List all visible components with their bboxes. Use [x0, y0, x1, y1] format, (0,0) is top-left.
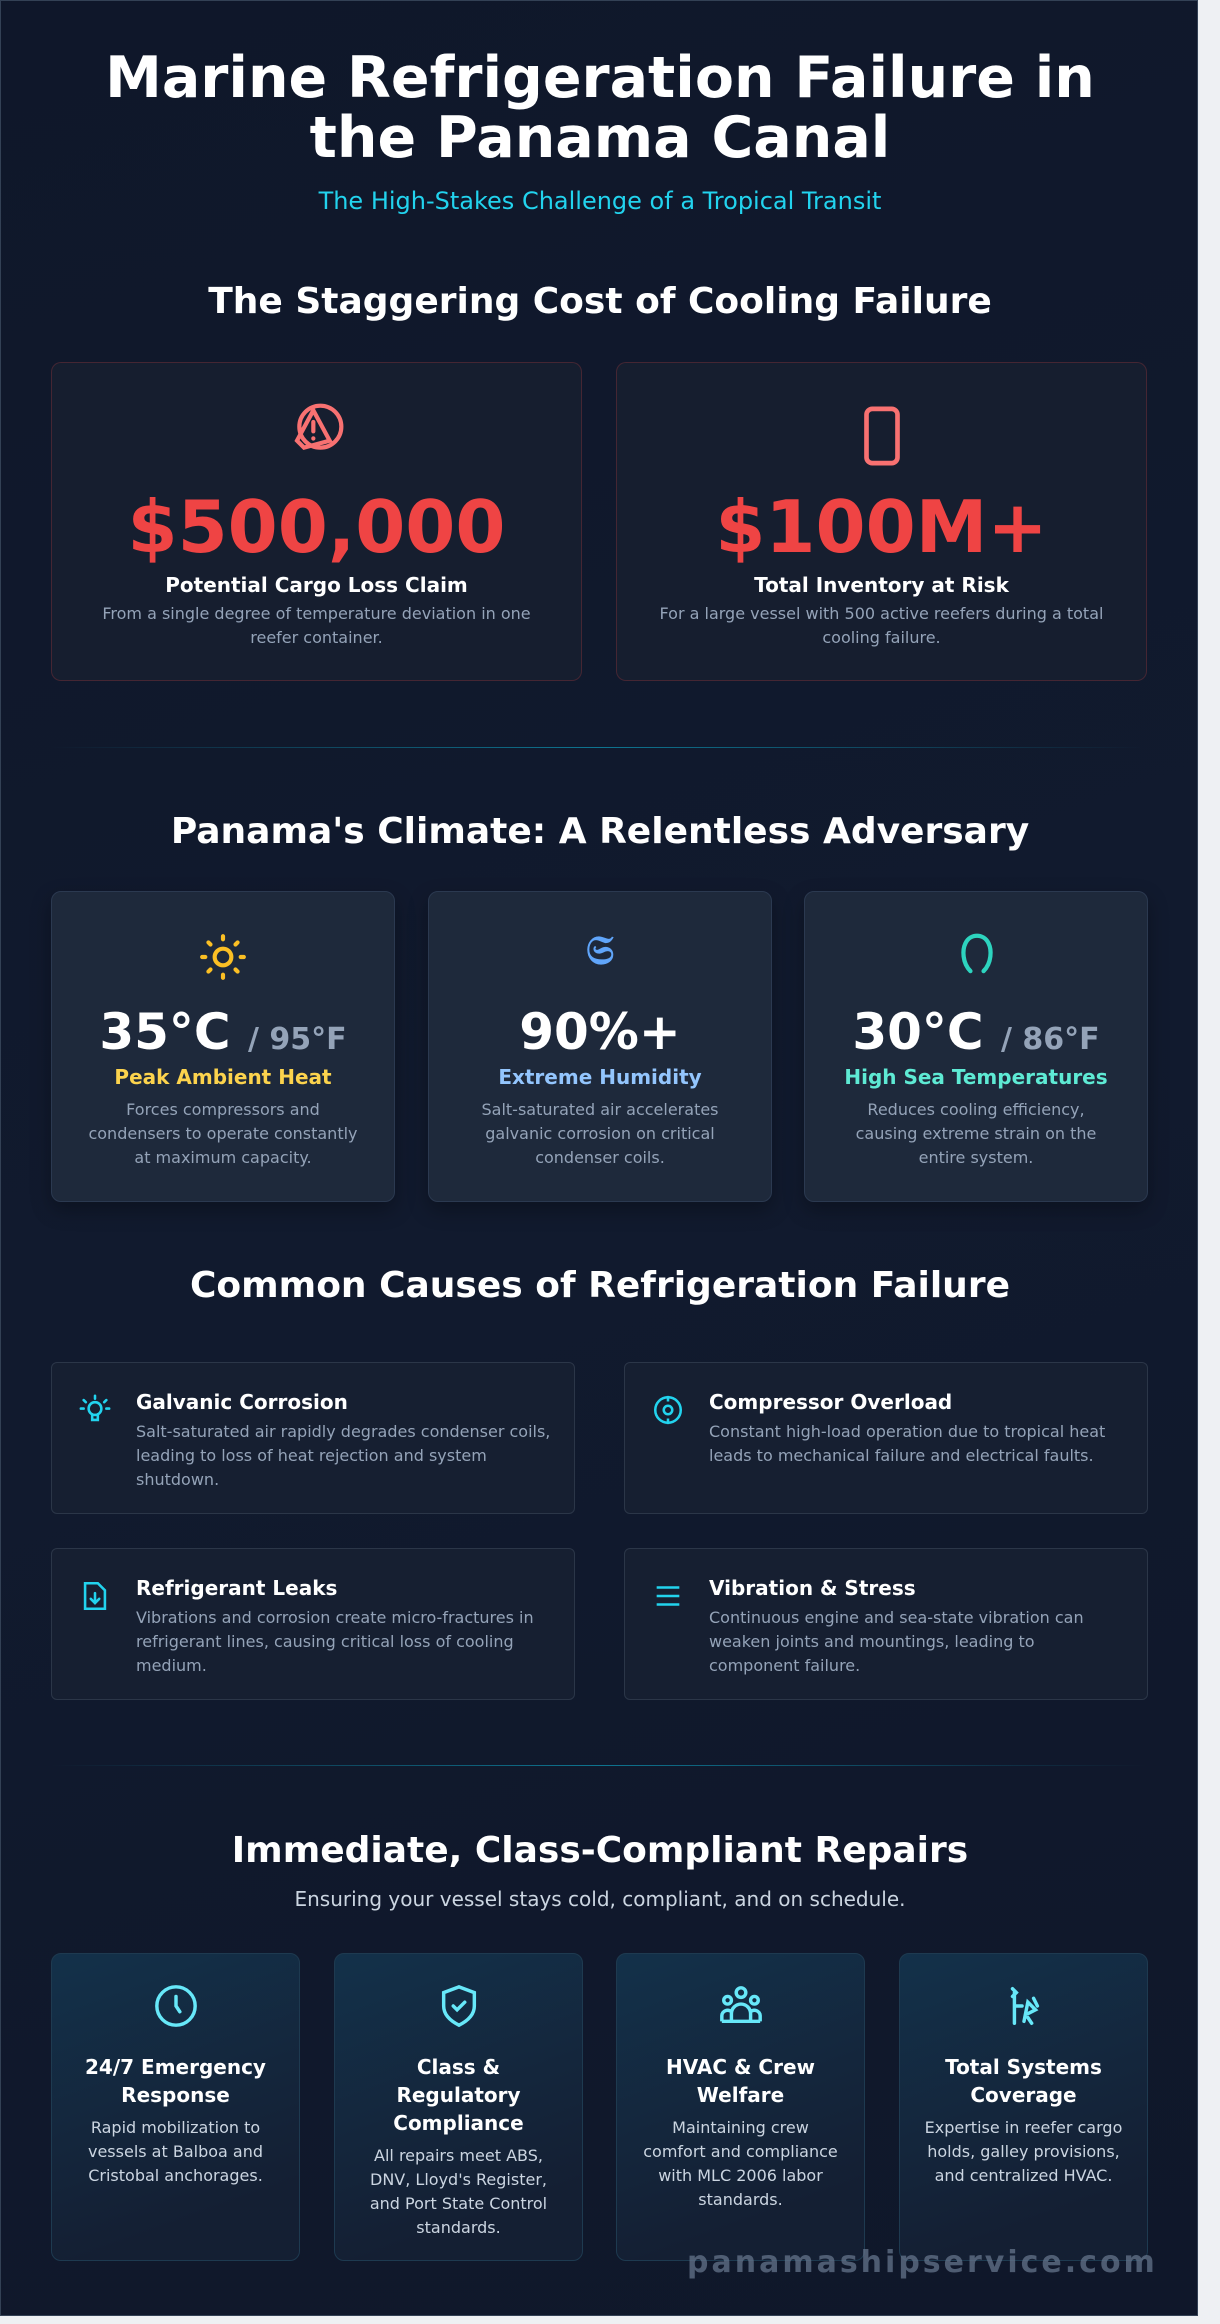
title: Total Systems	[945, 2055, 1102, 2079]
watermark: panamashipservice.com	[687, 2245, 1158, 2280]
description: All repairs meet ABS, DNV, Lloyd's Register, and Port State Control standards.	[370, 2146, 547, 2237]
label: High Sea Temperatures	[844, 1065, 1108, 1089]
description: Salt-saturated air accelerates galvanic corrosion on critical condenser coils.	[481, 1100, 719, 1167]
icon: bulb	[80, 1394, 110, 1422]
label: Extreme Humidity	[498, 1065, 702, 1089]
panel: class	[334, 1953, 583, 2261]
description: For a large vessel with 500 active reefers during a total cooling failure.	[660, 604, 1103, 647]
title: Vibration & Stress	[709, 1576, 916, 1600]
icon: systems	[1010, 1986, 1040, 2026]
number: $100M+	[715, 485, 1048, 569]
panel: vibration	[624, 1548, 1148, 1700]
subtitle: The High-Stakes Challenge of a Tropical Transit	[319, 187, 881, 215]
title: the Panama Canal	[310, 105, 890, 171]
description: Forces compressors and condensers to operate constantly at maximum capacity.	[88, 1100, 358, 1167]
title: Coverage	[970, 2083, 1077, 2107]
title: 24/7 Emergency Response	[85, 2055, 266, 2107]
description: Maintaining crew comfort and compliance with MLC 2006 labor standards.	[643, 2118, 838, 2209]
icon: people	[720, 1986, 762, 2023]
icon: lines	[656, 1586, 680, 1606]
icon: humidity: 𝔖	[586, 928, 614, 974]
title: Class &	[417, 2055, 500, 2079]
description: From a single degree of temperature deviation in one reefer container.	[102, 604, 531, 647]
icon: file	[84, 1582, 106, 1610]
description: Constant high-load operation due to tropical heat leads to mechanical failure and electrical faults.	[709, 1422, 1105, 1465]
icon: alert	[294, 404, 344, 450]
icon: shield	[442, 1985, 476, 2028]
title: Compliance	[393, 2111, 524, 2135]
panel: leaks	[51, 1548, 575, 1700]
title: Refrigerant Leaks	[136, 1576, 337, 1600]
description: Reduces cooling efficiency, causing extreme strain on the entire system.	[856, 1100, 1096, 1167]
panel: humidity	[428, 891, 772, 1202]
icon: sun	[200, 934, 246, 980]
title	[105, 45, 1095, 171]
label: Peak Ambient Heat	[114, 1065, 332, 1089]
stat: 35°C / 95°F	[99, 1003, 347, 1061]
heading: causes: Common Causes of Refrigeration Failure	[190, 1265, 1010, 1306]
panel: compressor	[624, 1362, 1148, 1514]
stat: 30°C / 86°F	[852, 1003, 1100, 1061]
description: Continuous engine and sea-state vibration can weaken joints and mountings, leading to component failure.	[709, 1608, 1084, 1675]
label: Total Inventory at Risk	[754, 573, 1009, 597]
subheading: Ensuring your vessel stays cold, compliant, and on schedule.	[294, 1887, 906, 1911]
title: Regulatory	[396, 2083, 521, 2107]
title	[393, 2055, 524, 2135]
panel: emergency	[51, 1953, 300, 2261]
panel: cost 500k	[51, 362, 582, 681]
panel: cost 100M	[616, 362, 1147, 681]
icon: clock	[155, 1985, 197, 2027]
panel: hvac	[616, 1953, 865, 2261]
title	[945, 2055, 1102, 2107]
panel: systems	[899, 1953, 1148, 2261]
title: HVAC & Crew	[666, 2055, 815, 2079]
title: Marine Refrigeration Failure in	[105, 45, 1095, 111]
panel: heat	[51, 891, 395, 1202]
heading: repairs: Immediate, Class-Compliant Repairs	[232, 1830, 968, 1871]
label: Potential Cargo Loss Claim	[165, 573, 468, 597]
icon: phone	[864, 406, 900, 466]
title	[666, 2055, 815, 2107]
icon: drop	[961, 934, 993, 974]
title: Welfare	[697, 2083, 784, 2107]
heading: climate: Panama's Climate: A Relentless Adversary	[171, 811, 1029, 852]
description: Expertise in reefer cargo holds, galley provisions, and centralized HVAC.	[925, 2118, 1122, 2185]
description: Salt-saturated air rapidly degrades condenser coils, leading to loss of heat rejection and system shutdown.	[136, 1422, 550, 1489]
heading: cost: The Staggering Cost of Cooling Failure	[208, 281, 992, 322]
icon: target	[654, 1396, 682, 1424]
stat: 90%+	[519, 1003, 681, 1061]
title: Compressor Overload	[709, 1390, 952, 1414]
title: Galvanic Corrosion	[136, 1390, 348, 1414]
number: $500,000	[127, 485, 506, 569]
description: Vibrations and corrosion create micro-fractures in refrigerant lines, causing critical loss of cooling medium.	[136, 1608, 534, 1675]
panel: sea	[804, 891, 1148, 1202]
panel: galvanic	[51, 1362, 575, 1514]
description: Rapid mobilization to vessels at Balboa and Cristobal anchorages.	[88, 2118, 263, 2185]
